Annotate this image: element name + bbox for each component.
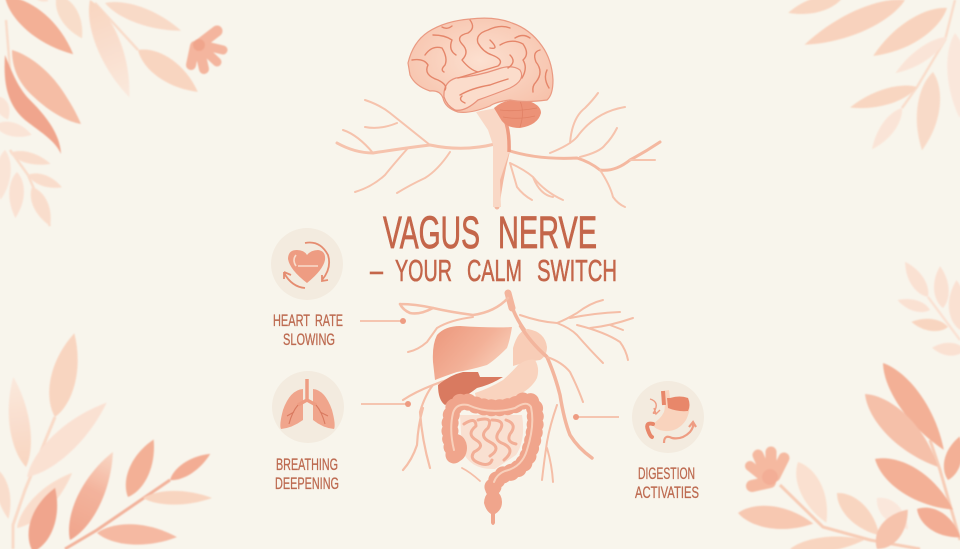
digestive organs xyxy=(433,325,547,525)
lower vagus nerve branches xyxy=(400,293,633,482)
title xyxy=(370,207,617,288)
caecum bulge xyxy=(445,434,467,462)
label: heart rate slowing: RATE xyxy=(315,311,343,330)
callout: heart rate slowing xyxy=(271,228,406,349)
brain xyxy=(408,18,553,112)
large intestine highlight xyxy=(451,404,532,482)
title line 1: VAGUS xyxy=(383,207,480,258)
connector: digestion xyxy=(573,414,619,420)
title line 2: YOUR xyxy=(395,253,452,288)
rectum xyxy=(484,490,502,525)
flower: top left xyxy=(191,31,223,69)
label: heart rate slowing: SLOWING xyxy=(283,330,335,349)
spleen and upper stomach xyxy=(513,329,547,366)
cerebrum xyxy=(408,18,553,112)
label: heart rate slowing xyxy=(273,311,343,349)
title line 2: SWITCH xyxy=(537,253,617,288)
foliage: top left xyxy=(0,0,204,229)
foliage: bottom left xyxy=(0,330,214,549)
label: digestion activaties: ACTIVATIES xyxy=(635,483,699,502)
gallbladder lobe xyxy=(438,372,503,405)
liver xyxy=(433,326,512,380)
brain folds xyxy=(412,20,549,103)
connector: breathing xyxy=(361,401,411,407)
cerebellum xyxy=(494,100,541,128)
small intestine xyxy=(460,415,523,469)
foliage: top right xyxy=(786,0,960,153)
label: breathing deepening xyxy=(275,455,339,493)
title line 1: NERVE xyxy=(498,207,597,258)
title line 2: – xyxy=(370,253,384,288)
callout: digestion activaties xyxy=(573,381,704,502)
label: digestion activaties: DIGESTION xyxy=(638,464,695,483)
connector: heart rate xyxy=(360,318,406,324)
title line 2 xyxy=(370,253,617,288)
title line 2: CALM xyxy=(467,253,522,288)
flower: bottom right xyxy=(750,452,784,486)
foliage: bottom right xyxy=(737,258,960,549)
temporal lobe xyxy=(444,67,522,110)
large intestine xyxy=(450,400,535,490)
icon: heart with circular arrows xyxy=(271,228,343,300)
label: digestion activaties xyxy=(635,464,699,502)
nerve over organs xyxy=(520,325,547,357)
stomach xyxy=(475,360,538,402)
large intestine scalloped edge xyxy=(450,400,535,490)
label: breathing deepening: BREATHING xyxy=(276,455,338,474)
brain stem and spinal cord xyxy=(476,108,510,207)
upper vagus nerve branches xyxy=(337,93,660,207)
label: breathing deepening: DEEPENING xyxy=(275,474,339,493)
icon: lungs xyxy=(272,371,344,443)
label: heart rate slowing: HEART xyxy=(273,311,310,330)
icon: stomach with arrows xyxy=(632,381,704,453)
callout: breathing deepening xyxy=(272,371,411,493)
